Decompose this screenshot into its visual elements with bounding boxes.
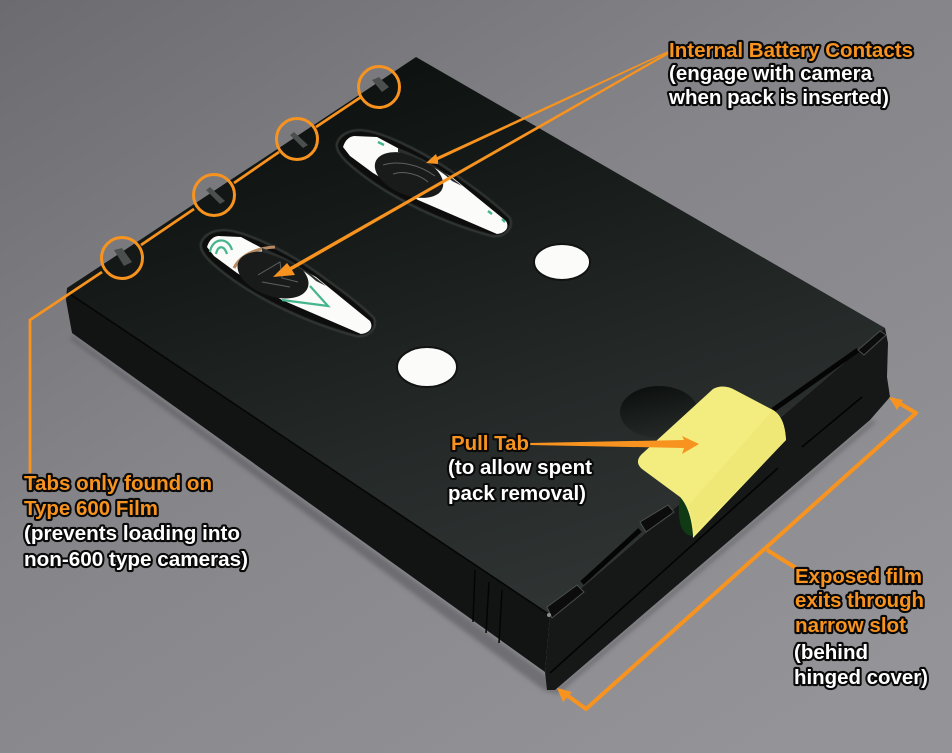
pack contact shadow [70,336,876,694]
top edge crease [70,294,550,615]
label: exposed film: narrow slot [795,614,906,637]
bracket arrowhead bottom [557,688,572,702]
arrow to lower battery contact [273,52,669,277]
bracket stem [767,550,796,568]
hinged cover line [550,397,862,673]
label: tabs: Type 600 Film [24,497,158,520]
round dimple by tab [620,386,698,438]
label: tabs: non-600 type cameras) [24,548,248,571]
lower battery slot [201,230,375,336]
corner clips [547,331,886,618]
tab circles [102,66,400,278]
label: tabs [24,472,248,571]
slot rim [201,230,375,336]
label: exposed film: (behind [794,641,868,664]
round window upper [534,244,590,280]
label: internal battery contacts [668,39,913,109]
battery contact [231,243,315,307]
battery scratch marks [383,163,435,182]
arrow to upper battery contact [426,51,668,164]
label: pull tab: Pull Tab [451,432,529,455]
round window lower [397,347,457,387]
slot opening [343,136,507,234]
label: pull tab [448,432,592,505]
arrow to pull tab [530,436,699,454]
label: exposed film: Exposed film [795,565,922,588]
black tabs on pack edge [114,77,389,266]
label: internal battery contacts: when pack is inserted) [668,86,889,109]
label: pull tab: pack removal) [448,482,586,505]
label: exposed film: exits through [795,589,924,612]
label: pull tab: (to allow spent [448,456,592,479]
tabs leader line [30,97,361,473]
front rail groove [582,350,858,583]
upper battery slot [337,130,511,236]
pack front face [545,328,890,690]
label: internal battery contacts: (engage with camera [669,62,873,85]
pull tab dark underside [679,497,693,536]
rim shade over battery [398,148,462,186]
film pack [66,57,890,694]
green marks [378,142,505,222]
corner highlight [547,613,551,617]
pack top face [67,57,885,615]
rim shade over battery [262,248,326,286]
bracket arrowhead top [889,397,903,410]
label: tabs: (prevents loading into [24,522,240,545]
copper battery edge [234,247,275,268]
yellow pull tab [638,386,786,538]
pull tab fold shade [689,410,786,532]
slot rim [337,130,511,236]
green print [210,240,328,306]
pack left side face [66,288,550,672]
battery contact [368,143,450,207]
battery scratch marks [258,262,298,287]
label: tabs: Tabs only found on [24,472,212,495]
label: internal battery contacts: Internal Battery Contacts [669,39,913,62]
slot opening [207,236,371,334]
bracket along film exit [560,399,916,709]
label: exposed film: hinged cover) [794,666,928,689]
side ribs [473,570,502,643]
label: exposed film [794,565,928,689]
